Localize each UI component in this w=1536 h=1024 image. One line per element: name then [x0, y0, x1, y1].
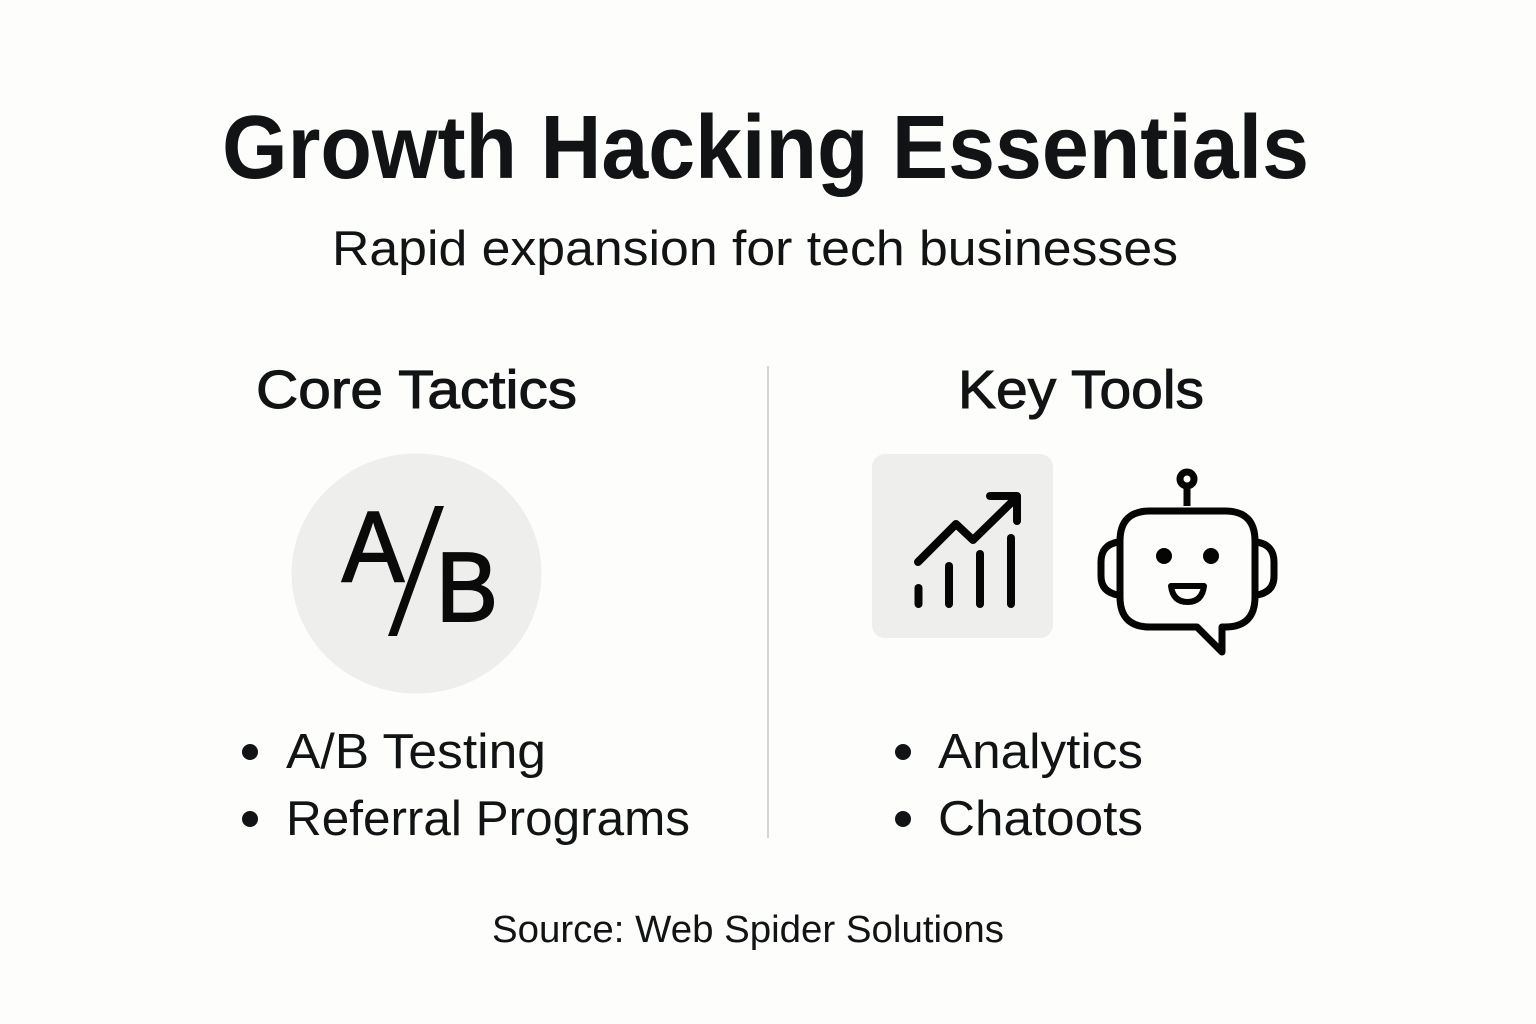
panel: core tactics [242, 360, 690, 846]
source note: Source: Web Spider Solutions [492, 909, 1004, 951]
icon: A/B testing badge: A [342, 491, 404, 603]
heading: key tools: Key Tools [958, 360, 1204, 420]
list: key tools: Analytics [938, 725, 1143, 779]
heading: core tactics: Core Tactics [256, 360, 577, 420]
list: core tactics: Referral Programs [286, 792, 690, 846]
icon: A/B testing badge: B [436, 532, 498, 642]
list: core tactics: A/B Testing [286, 725, 546, 779]
panel: key tools [872, 360, 1274, 846]
list: core tactics [242, 725, 690, 846]
icon: analytics chart [872, 454, 1053, 638]
list: key tools: Chatoots [938, 792, 1143, 846]
title: Growth Hacking Essentials [222, 98, 1309, 198]
icon: chatbot [1101, 472, 1274, 652]
subtitle: Rapid expansion for tech businesses [332, 222, 1178, 276]
list: key tools [895, 725, 1143, 846]
icon: A/B testing badge [292, 454, 542, 694]
